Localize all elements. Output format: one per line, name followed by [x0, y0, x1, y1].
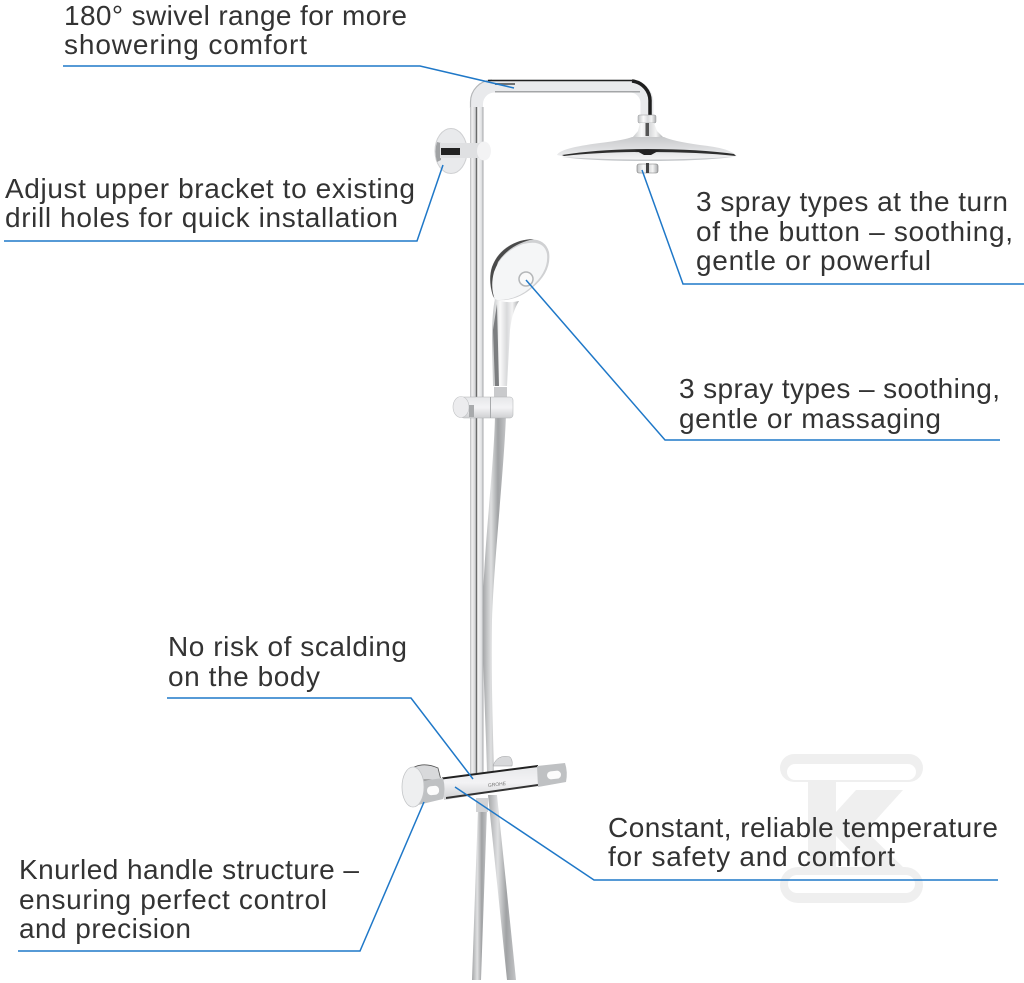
text: constant temperature: for safety and comfort [608, 841, 895, 872]
text: no scalding [168, 631, 407, 692]
callout line: no scalding [167, 698, 473, 779]
text: overhead spray types: of the button – soothing, [696, 216, 1013, 247]
text: constant temperature: Constant, reliable temperature [608, 812, 998, 843]
text: knurled handle [19, 854, 359, 944]
riser rail [470, 107, 484, 775]
text: overhead spray types [696, 186, 1013, 276]
text: swivel range [64, 0, 407, 60]
callout line: hand shower spray types [526, 280, 1000, 440]
lower hoses [472, 795, 516, 980]
callout line: swivel range [63, 66, 514, 88]
overhead shower head [557, 115, 737, 173]
text: swivel range: showering comfort [64, 29, 307, 60]
callout line: upper bracket [4, 165, 443, 241]
text: overhead spray types: 3 spray types at the turn [696, 186, 1008, 217]
callout line: constant temperature [455, 787, 998, 880]
text: upper bracket: Adjust upper bracket to existing [5, 173, 415, 204]
text: upper bracket: drill holes for quick installation [5, 202, 398, 233]
text: no scalding: on the body [168, 661, 320, 692]
text: hand shower spray types: gentle or massaging [679, 403, 941, 434]
slider [453, 396, 513, 418]
text: overhead spray types: gentle or powerful [696, 245, 931, 276]
watermark logo [780, 754, 923, 903]
hose upper [483, 415, 506, 772]
hand shower [490, 239, 549, 397]
callout line: knurled handle [18, 802, 424, 951]
text: no scalding: No risk of scalding [168, 631, 407, 662]
text: swivel range: 180° swivel range for more [64, 0, 407, 31]
callout line: overhead spray types [642, 170, 1024, 284]
text: hand shower spray types [679, 373, 1000, 434]
overhead arm [470, 80, 650, 118]
text: upper bracket [5, 173, 415, 233]
thermostat mixer [402, 756, 567, 807]
logo: GROHE [488, 781, 507, 789]
text: constant temperature [608, 812, 998, 872]
shower product [402, 80, 737, 980]
text: hand shower spray types: 3 spray types – soothing, [679, 373, 1000, 404]
text: knurled handle: Knurled handle structure – [19, 854, 359, 885]
text: knurled handle: and precision [19, 913, 191, 944]
wall bracket [435, 128, 491, 174]
text: knurled handle: ensuring perfect control [19, 884, 327, 915]
